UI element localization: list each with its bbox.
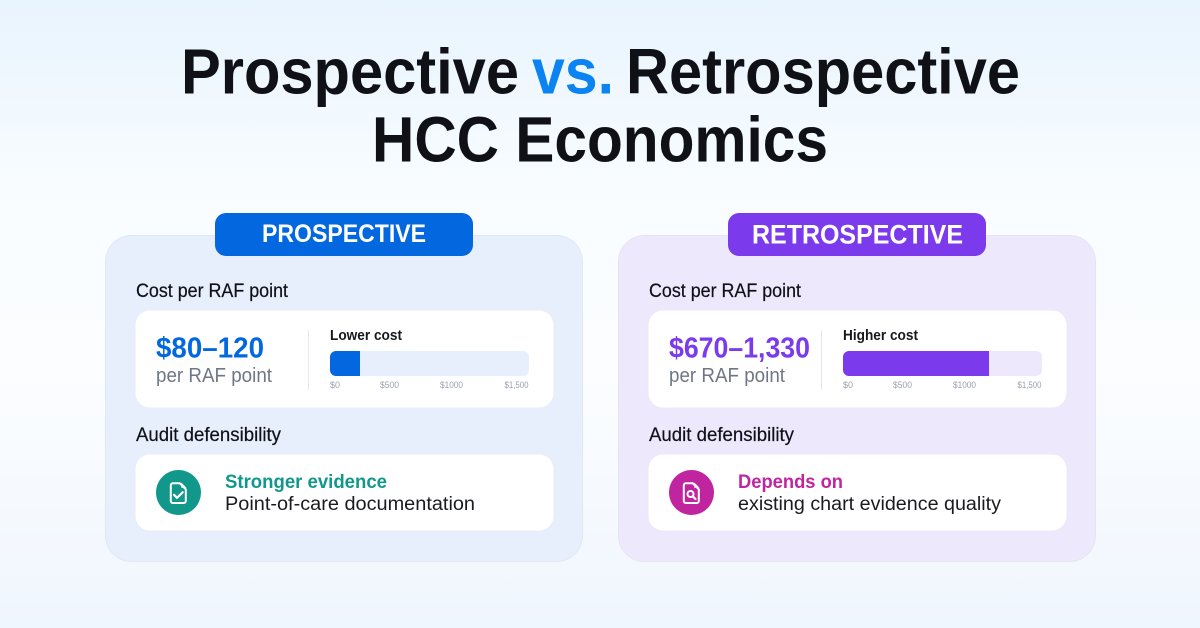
bar chart: higher cost xyxy=(843,328,1042,391)
title: vs. xyxy=(532,36,614,108)
bar chart: higher cost: $1000 xyxy=(953,380,976,391)
title: Retrospective xyxy=(626,36,1020,108)
icon: document with check xyxy=(156,470,201,515)
cost value: $80–120 xyxy=(156,332,264,364)
badge: retrospective xyxy=(728,213,986,256)
title: HCC Economics xyxy=(372,104,828,176)
badge: retrospective: RETROSPECTIVE xyxy=(752,220,963,250)
heading: audit defensibility: Audit defensibility xyxy=(649,425,794,446)
bar chart: lower cost: $500 xyxy=(380,380,399,391)
badge: prospective: PROSPECTIVE xyxy=(262,220,426,248)
bar chart: lower cost: Lower cost xyxy=(330,328,402,344)
bar chart: higher cost: Higher cost xyxy=(843,328,918,344)
panel: retrospective xyxy=(618,213,1096,562)
bar chart: lower cost: $1000 xyxy=(440,380,463,391)
audit headline: Depends on xyxy=(738,472,843,493)
bar chart: higher cost: $1,500 xyxy=(1018,380,1042,391)
audit detail: Point-of-care documentation xyxy=(225,494,475,515)
title xyxy=(181,36,1020,176)
card: prospective cost xyxy=(135,310,554,408)
heading: audit defensibility: Audit defensibility xyxy=(136,425,281,446)
bar chart: lower cost: $0 xyxy=(330,380,340,391)
badge: prospective xyxy=(215,213,473,256)
bar chart: higher cost: $0 xyxy=(843,380,853,391)
cost unit: per RAF point xyxy=(669,365,785,387)
audit headline: Stronger evidence xyxy=(225,472,387,493)
title: Prospective xyxy=(181,36,519,108)
audit detail: existing chart evidence quality xyxy=(738,494,1002,515)
heading: cost per RAF point: Cost per RAF point xyxy=(649,281,802,302)
card: retrospective cost xyxy=(648,310,1067,408)
cost value: $670–1,330 xyxy=(669,332,810,364)
heading: cost per RAF point: Cost per RAF point xyxy=(136,281,289,302)
card: prospective audit xyxy=(135,454,554,531)
bar chart: lower cost xyxy=(330,328,529,391)
bar chart: higher cost: $500 xyxy=(893,380,912,391)
bar chart: lower cost: $1,500 xyxy=(504,380,528,391)
icon: document with magnifier xyxy=(669,470,714,515)
panel: prospective xyxy=(106,213,582,562)
cost unit: per RAF point xyxy=(156,365,272,387)
card: retrospective audit xyxy=(648,454,1067,531)
